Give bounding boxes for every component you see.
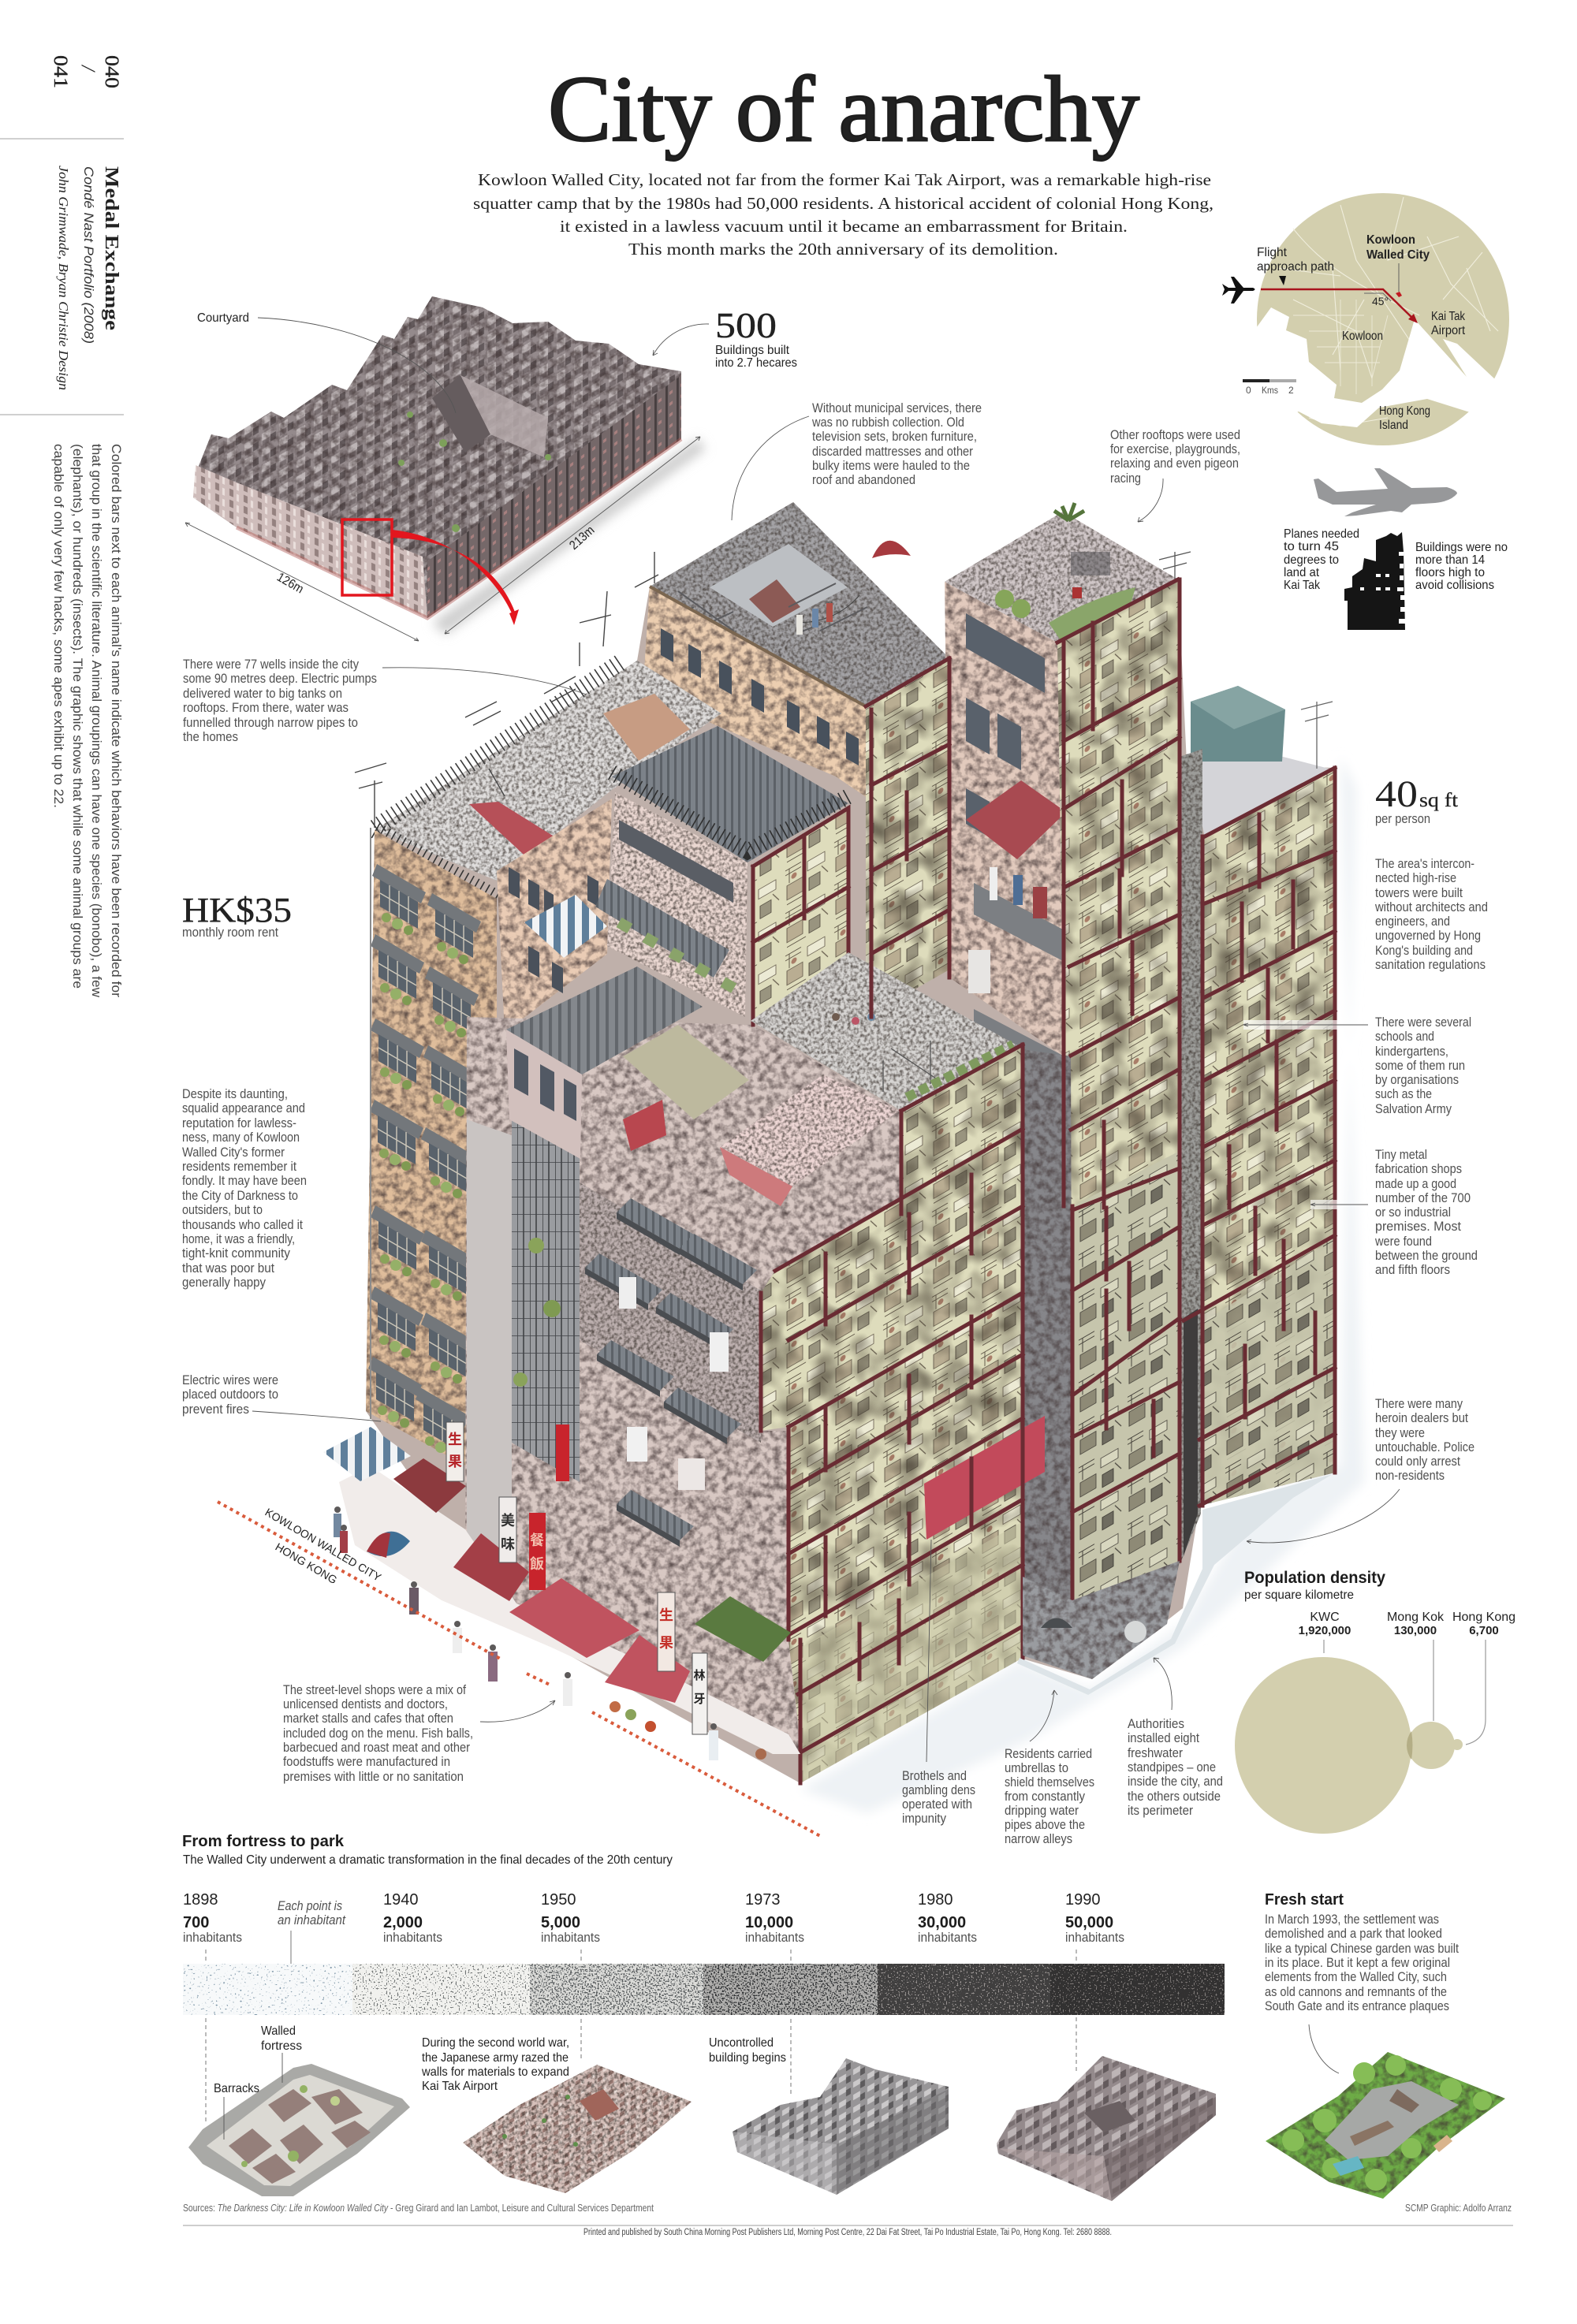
text: wells: funnelled through narrow pipes to xyxy=(183,715,358,730)
text: standpipes: the others outside xyxy=(1128,1789,1221,1804)
map: flight approach to Kai Tak: Kowloon xyxy=(1342,330,1383,343)
stat: 500 buildings: into 2.7 hecares xyxy=(715,356,797,370)
hanging signs: 林 xyxy=(693,1668,706,1682)
text: community xyxy=(182,1086,307,1290)
text: fabrication: number of the 700 xyxy=(1375,1190,1471,1205)
timeline: year labels: 50,000 xyxy=(1065,1914,1113,1931)
street and shopfronts xyxy=(339,1466,800,1754)
red-light rooms xyxy=(924,1416,1045,1540)
hanging signs xyxy=(446,1422,707,1734)
text: towers: without architects and xyxy=(1374,899,1488,914)
graphic credit: SCMP Graphic: Adolfo Arranz xyxy=(1405,2202,1512,2214)
map: flight approach to Kai Tak: Kai Tak xyxy=(1431,310,1466,323)
text: rooftops: racing xyxy=(1110,471,1141,486)
left rail: credit block: John Grimwade, Bryan Christie Design xyxy=(56,166,71,390)
left rail: page numbers: 041 xyxy=(50,55,71,88)
text: brothels: Brothels and xyxy=(902,1768,967,1783)
text: wells xyxy=(183,657,377,744)
timeline: year labels: inhabitants xyxy=(541,1930,600,1945)
second tan block xyxy=(497,799,612,1033)
model: 1898 walled fortress xyxy=(188,2064,410,2196)
text: community: that was poor but xyxy=(182,1261,274,1276)
text: standpipes: standpipes – one xyxy=(1128,1760,1216,1775)
dimension: 213m xyxy=(445,437,700,634)
hanging signs: 生 xyxy=(448,1432,462,1447)
timeline: year labels: inhabitants xyxy=(183,1930,242,1945)
water xyxy=(1246,307,1518,427)
boundary labels: HONG KONG xyxy=(273,1540,339,1586)
text: brothels: impunity xyxy=(902,1811,946,1826)
hanging signs: 果 xyxy=(659,1635,673,1651)
leader: fabrication xyxy=(1310,1200,1368,1209)
text: fabrication: premises. Most xyxy=(1375,1219,1461,1234)
dimension: 126m: 126m xyxy=(274,571,306,596)
text: street level shops: foodstuffs were manufactured in xyxy=(283,1754,450,1769)
text: standpipes: inside the city, and xyxy=(1128,1774,1223,1789)
chart: population density: per square kilometre xyxy=(1244,1588,1354,1602)
label: barracks: Barracks xyxy=(214,2082,259,2095)
text: umbrellas: Residents carried xyxy=(1005,1746,1092,1761)
annotation: each point is an inhabitant: an inhabitant xyxy=(278,1912,346,1927)
map: flight approach to Kai Tak: Island xyxy=(1379,419,1408,432)
terrace back rooftop xyxy=(375,661,721,881)
model: 1990 city xyxy=(997,2056,1216,2201)
text: rubbish xyxy=(811,400,982,487)
text: towers: nected high-rise xyxy=(1375,870,1456,885)
text: standpipes: Authorities xyxy=(1128,1716,1184,1731)
chart: population density: Mong Kok xyxy=(1387,1611,1445,1624)
text: fresh start: as old cannons and remnants of the xyxy=(1265,1984,1447,1999)
leader: standpipes xyxy=(1154,1658,1172,1710)
building underlay xyxy=(366,502,1335,1783)
text: fresh start xyxy=(1265,1912,1459,2013)
text: fresh start: In March 1993, the settlement was xyxy=(1265,1912,1439,1927)
text: second world war: During the second world war, xyxy=(422,2036,569,2050)
left rail: description paragraph: Colored bars next to each animal's name indicate which behaviors have been recorded for xyxy=(109,444,124,997)
model: 1973 city xyxy=(733,2058,949,2195)
text: street level shops: unlicensed dentists and doctors, xyxy=(283,1696,448,1711)
model: 1940 town xyxy=(463,2065,692,2193)
text: street level shops: included dog on the menu. Fish balls, xyxy=(283,1726,473,1741)
aerial illustration of the Walled City xyxy=(193,296,706,635)
text: community: home, it was a friendly, xyxy=(182,1231,295,1246)
leader: shops xyxy=(480,1700,555,1722)
text: community: Walled City's former xyxy=(182,1145,285,1160)
stat: 40 sq ft: sq ft xyxy=(1419,790,1458,811)
map: flight approach to Kai Tak: 45° xyxy=(1372,295,1389,307)
timeline: year labels: inhabitants xyxy=(745,1930,804,1945)
text: schools: There were several xyxy=(1375,1015,1471,1030)
text: rooftops: Other rooftops were used xyxy=(1110,427,1240,442)
map: flight approach to Kai Tak: Kowloon xyxy=(1366,233,1415,247)
street umbrella xyxy=(367,1532,410,1556)
timeline: year labels: inhabitants xyxy=(1065,1930,1124,1945)
section: lower big block rooms xyxy=(761,1045,1023,1783)
chart: population density: 130,000 xyxy=(1394,1624,1437,1637)
text: fresh start: demolished and a park that looked xyxy=(1265,1926,1442,1941)
text: umbrellas xyxy=(1005,1746,1094,1846)
text: towers: engineers, and xyxy=(1375,914,1450,929)
chart: population density: 1,920,000 xyxy=(1299,1624,1351,1637)
left rail: description paragraph: capable of only very few hacks, some apes exhibit up to 22. xyxy=(51,444,66,808)
flight path xyxy=(1261,289,1415,321)
text: schools: some of them run xyxy=(1375,1058,1465,1073)
left rail: credit block xyxy=(56,166,121,390)
tower B roof xyxy=(945,512,1178,642)
text: heroin xyxy=(1375,1396,1474,1483)
map: flight approach to Kai Tak: Walled City xyxy=(1366,248,1430,262)
population dot bar xyxy=(183,1964,1225,2015)
text: wells: delivered water to big tanks on xyxy=(183,686,342,701)
text: fabrication: Tiny metal xyxy=(1375,1147,1427,1162)
text: electric wires: placed outdoors to xyxy=(182,1387,278,1402)
text: standpipes: installed eight xyxy=(1128,1730,1199,1745)
text: schools: such as the xyxy=(1375,1086,1432,1101)
timeline: year labels: 1950 xyxy=(541,1891,576,1909)
text: towers: The area's intercon- xyxy=(1375,856,1474,871)
chart: population density: KWC xyxy=(1310,1611,1340,1624)
imprint: Printed and published by South China Morning Post Publishers Ltd, Morning Post Centre, 22 Dai Fat Street, Tai Po Industrial Estate, Tai Po, Hong Kong. Tel: 2680 8888. xyxy=(583,2228,1112,2237)
icon: black building silhouette xyxy=(1344,532,1405,630)
tower A roof xyxy=(650,502,949,706)
timeline: year labels: 10,000 xyxy=(745,1914,793,1931)
courtyard xyxy=(432,375,490,453)
map: flight approach to Kai Tak: Hong Kong xyxy=(1379,404,1430,418)
map: flight approach to Kai Tak: 2 xyxy=(1288,385,1294,396)
label: walled fortress: Walled xyxy=(261,2024,296,2038)
alley xyxy=(1017,1048,1072,1663)
map: flight approach to Kai Tak: Flight xyxy=(1257,246,1288,259)
right ground xyxy=(1017,1474,1333,1695)
left rail: description paragraph: (elephants), or hundreds (insects). The graphic shows that while some animal groups are xyxy=(70,444,85,989)
text: schools: schools and xyxy=(1375,1029,1434,1044)
label: walled fortress xyxy=(261,2024,302,2083)
left rail: credit block: Medal Exchange xyxy=(101,166,121,330)
text: rubbish: bulky items were hauled to the xyxy=(812,458,970,473)
text: street level shops: barbecued and roast meat and other xyxy=(283,1740,470,1755)
stat: 500 buildings xyxy=(653,305,797,370)
text: fresh start: South Gate and its entrance plaques xyxy=(1265,1998,1449,2013)
text: second world war: walls for materials to expand xyxy=(421,2065,569,2079)
text: buildings limit: Buildings were no xyxy=(1415,541,1508,554)
pink facade under grey roof xyxy=(607,792,747,1017)
heading: from fortress to park: From fortress to park xyxy=(182,1833,345,1850)
text: schools: kindergartens, xyxy=(1375,1044,1448,1059)
text: fabrication xyxy=(1374,1147,1478,1277)
chart: population density: Hong Kong xyxy=(1452,1611,1515,1624)
icon: grey jumbo jet xyxy=(1314,468,1457,516)
map: flight approach to Kai Tak: 0 xyxy=(1246,385,1251,396)
map: flight approach to Kai Tak: Airport xyxy=(1431,324,1466,337)
text: fabrication: or so industrial xyxy=(1375,1205,1451,1220)
text: brothels xyxy=(902,1768,975,1826)
umbrella xyxy=(872,541,911,558)
left rail: description paragraph xyxy=(51,444,124,998)
text: heroin: they were xyxy=(1375,1425,1425,1440)
stat: 500 buildings: 500 xyxy=(715,305,777,345)
text: wells: rooftops. From there, water was xyxy=(183,700,349,715)
hanging signs: 果 xyxy=(448,1454,462,1469)
leader: rooftops xyxy=(1138,479,1163,522)
text: uncontrolled building xyxy=(709,2036,786,2065)
section: right block rooms xyxy=(1199,768,1335,1506)
text: community: fondly. It may have been xyxy=(182,1173,307,1188)
leader: rubbish xyxy=(732,416,809,520)
text: rubbish: Without municipal services, there xyxy=(812,400,982,415)
text: wells: some 90 metres deep. Electric pumps xyxy=(183,671,377,686)
text: community: generally happy xyxy=(182,1275,266,1290)
text: rubbish: television sets, broken furniture, xyxy=(812,429,977,444)
main cutaway illustration xyxy=(323,502,1364,1813)
heading: fresh start: Fresh start xyxy=(1265,1891,1344,1909)
text: planes needed: Planes needed xyxy=(1284,527,1359,541)
stat: 40 sq ft: 40 xyxy=(1375,773,1418,815)
tower A facade xyxy=(643,587,867,798)
tower B facade xyxy=(945,582,1064,1056)
icon: small plane xyxy=(1222,277,1255,304)
left rail: description paragraph: that group in the scientific literature. Animal groupings can have one species (bonobo), a few xyxy=(89,444,104,998)
text: second world war xyxy=(421,2036,569,2093)
text: planes needed: degrees to xyxy=(1284,553,1339,567)
text: street level shops: market stalls and cafes that often xyxy=(283,1711,453,1726)
chart: population density: 6,700 xyxy=(1469,1624,1499,1637)
timeline: year labels: 1990 xyxy=(1065,1891,1101,1909)
ground glow xyxy=(800,757,1364,1813)
text: standpipes xyxy=(1128,1716,1223,1818)
text: community: the City of Darkness to xyxy=(182,1188,298,1203)
text: schools xyxy=(1375,1015,1471,1116)
text: fabrication: and fifth floors xyxy=(1375,1262,1450,1277)
label: barracks xyxy=(214,2082,259,2140)
text: fresh start: elements from the Walled City, such xyxy=(1265,1969,1447,1984)
text: towers xyxy=(1374,856,1488,972)
text: community: residents remember it xyxy=(182,1159,296,1174)
text: fabrication: fabrication shops xyxy=(1375,1161,1462,1176)
text: towers: towers were built xyxy=(1375,885,1463,900)
text: community: Despite its daunting, xyxy=(182,1086,288,1101)
text: buildings limit: floors high to xyxy=(1415,566,1485,579)
red selection box and arrow xyxy=(342,520,519,625)
text: rubbish: discarded mattresses and other xyxy=(812,444,973,459)
leader: heroin xyxy=(1247,1489,1400,1544)
text: umbrellas: pipes above the xyxy=(1005,1817,1085,1832)
section: centre column rooms xyxy=(1057,579,1180,1600)
heading: from fortress to park: The Walled City underwent a dramatic transformation in the final decades of the 20th century xyxy=(183,1853,673,1867)
chart: population density: Population density xyxy=(1244,1569,1385,1587)
front grey roof xyxy=(506,966,703,1074)
hanging signs: 味 xyxy=(501,1536,515,1552)
heading: from fortress to park xyxy=(182,1833,673,1867)
chart: population density xyxy=(1235,1569,1515,1834)
dashed timeline leaders xyxy=(206,1950,1076,2121)
pedestrians and produce xyxy=(334,1507,766,1760)
annotation: each point is an inhabitant: Each point is xyxy=(278,1898,342,1913)
red dotted boundary line xyxy=(218,1502,822,1837)
text: electric wires: prevent fires xyxy=(182,1402,249,1417)
left rail: page numbers xyxy=(50,55,122,88)
left rail: page numbers: 040 xyxy=(101,55,122,88)
timeline: year labels: inhabitants xyxy=(918,1930,977,1945)
leader: schools xyxy=(1243,1020,1368,1030)
beige left tower xyxy=(366,830,497,1466)
timeline: year labels: 30,000 xyxy=(918,1914,966,1931)
text: brothels: gambling dens xyxy=(902,1782,975,1797)
text: umbrellas: shield themselves xyxy=(1005,1775,1094,1790)
stair column xyxy=(1180,749,1202,1565)
text: heroin: untouchable. Police xyxy=(1375,1439,1474,1454)
text: heroin: non-residents xyxy=(1375,1468,1445,1483)
text: fresh start: like a typical Chinese garden was built xyxy=(1265,1941,1459,1956)
text: fresh start: in its place. But it kept a few original xyxy=(1265,1955,1450,1970)
text: rubbish: roof and abandoned xyxy=(812,472,915,487)
text: umbrellas: from constantly xyxy=(1005,1789,1085,1804)
text: street level shops xyxy=(283,1682,473,1784)
text: community: thousands who called it xyxy=(182,1217,303,1232)
section: tower A rooms xyxy=(866,658,949,1017)
text: fabrication: between the ground xyxy=(1375,1248,1478,1263)
leader: wells xyxy=(382,668,587,695)
leader: park xyxy=(1309,2024,1339,2073)
leader: brothels xyxy=(926,1540,931,1762)
text: second world war: Kai Tak Airport xyxy=(422,2080,498,2093)
text: towers: ungoverned by Hong xyxy=(1375,928,1481,943)
intro text: This month marks the 20th anniversary of its demolition. xyxy=(628,240,1058,259)
timeline: year labels: 700 xyxy=(183,1914,209,1931)
text: wells: the homes xyxy=(183,729,238,744)
stat: room rent: monthly room rent xyxy=(182,925,278,940)
hanging signs: 飯 xyxy=(530,1555,544,1572)
intro text: Kowloon Walled City, located not far from the former Kai Tak Airport, was a remarkable high-rise xyxy=(478,170,1211,189)
stat: 40 sq ft: per person xyxy=(1375,811,1430,826)
hanging signs: 牙 xyxy=(693,1693,706,1706)
floors and walls xyxy=(761,1045,1023,1783)
text: rooftops: for exercise, playgrounds, xyxy=(1110,441,1240,456)
map: flight approach to Kai Tak xyxy=(1222,193,1518,445)
text: rooftops: relaxing and even pigeon xyxy=(1110,456,1239,471)
text: towers: sanitation regulations xyxy=(1375,957,1486,972)
text: buildings limit: avoid collisions xyxy=(1415,579,1494,592)
text: community: tight-knit community xyxy=(182,1246,290,1261)
text: buildings limit: more than 14 xyxy=(1415,553,1485,567)
timeline: year labels xyxy=(183,1891,1124,1945)
text: umbrellas: narrow alleys xyxy=(1005,1831,1072,1846)
dimension: 126m xyxy=(185,523,419,641)
text: schools: Salvation Army xyxy=(1375,1101,1452,1116)
timeline: year labels: 1973 xyxy=(745,1891,781,1909)
text: planes needed: land at xyxy=(1284,566,1320,579)
timeline: year labels: inhabitants xyxy=(383,1930,442,1945)
annotation: each point is an inhabitant xyxy=(278,1898,346,1967)
text: fabrication: were found xyxy=(1374,1234,1432,1249)
text: towers: Kong's building and xyxy=(1375,943,1473,958)
lower facade mass xyxy=(465,1017,901,1752)
text: brothels: operated with xyxy=(902,1797,972,1812)
text: community: reputation for lawless- xyxy=(182,1115,296,1130)
text: standpipes: its perimeter xyxy=(1128,1803,1193,1818)
sources: Sources: The Darkness City: Life in Kowloon Walled City - Greg Girard and Ian Lambot, Leisure and Cultural Services Department xyxy=(183,2202,654,2214)
stat: 40 sq ft xyxy=(1375,773,1458,826)
text: community: squalid appearance and xyxy=(182,1101,305,1115)
timeline: year labels: 1898 xyxy=(183,1891,218,1909)
text: heroin: There were many xyxy=(1375,1396,1463,1411)
text: community: ness, many of Kowloon xyxy=(182,1130,300,1145)
middle terrace xyxy=(751,952,1017,1111)
intro text: squatter camp that by the 1980s had 50,000 residents. A historical accident of colonial Hong Kong, xyxy=(473,194,1214,213)
text: electric wires: Electric wires were xyxy=(182,1372,278,1387)
left rail: credit block: Condé Nast Portfolio (2008) xyxy=(81,166,96,344)
text: heroin: could only arrest xyxy=(1375,1454,1460,1469)
text: second world war: the Japanese army razed the xyxy=(422,2051,569,2065)
label: courtyard xyxy=(197,311,456,413)
text: planes needed xyxy=(1284,527,1359,592)
text: planes needed: to turn 45 xyxy=(1284,540,1339,553)
leader: electric wires xyxy=(252,1411,381,1421)
text: community: outsiders, but to xyxy=(182,1202,263,1217)
hanging signs: 美 xyxy=(501,1512,515,1529)
left rail: page numbers: / xyxy=(77,64,99,73)
text: uncontrolled building: building begins xyxy=(709,2051,786,2065)
text: buildings limit xyxy=(1415,541,1508,592)
intro text xyxy=(473,170,1214,259)
stat: 500 buildings: Buildings built xyxy=(715,344,790,357)
hanging signs: 餐 xyxy=(530,1533,544,1548)
model: park xyxy=(1266,2052,1505,2199)
text: fabrication: made up a good xyxy=(1375,1176,1456,1191)
timeline: year labels: 5,000 xyxy=(541,1914,580,1931)
intro text: it existed in a lawless vacuum until it became an embarrassment for Britain. xyxy=(560,217,1128,236)
small section rooms xyxy=(753,808,848,1025)
text: electric wires xyxy=(182,1372,278,1417)
label: courtyard: Courtyard xyxy=(197,311,249,325)
map: flight approach to Kai Tak: Kms xyxy=(1262,385,1278,396)
corrugated roof xyxy=(612,726,848,862)
timeline: year labels: 1940 xyxy=(383,1891,418,1909)
timeline: year labels: 2,000 xyxy=(383,1914,423,1931)
map: flight approach to Kai Tak: approach path xyxy=(1257,260,1334,274)
text: rubbish: was no rubbish collection. Old xyxy=(811,415,964,430)
text: planes needed: Kai Tak xyxy=(1284,579,1321,592)
text: street level shops: The street-level shops were a mix of xyxy=(283,1682,466,1697)
text: umbrellas: dripping water xyxy=(1005,1803,1079,1818)
text: uncontrolled building: Uncontrolled xyxy=(709,2036,774,2050)
dimension: 213m: 213m xyxy=(567,523,597,553)
label: walled fortress: fortress xyxy=(261,2039,302,2053)
aerials xyxy=(355,552,658,828)
shop awnings xyxy=(393,1458,791,1703)
text: standpipes: freshwater xyxy=(1128,1745,1183,1760)
text: street level shops: premises with little or no sanitation xyxy=(283,1769,464,1784)
boundary labels: KOWLOON WALLED CITY xyxy=(263,1506,384,1584)
timeline: year labels: 1980 xyxy=(918,1891,953,1909)
text: wells: There were 77 wells inside the city xyxy=(183,657,359,672)
text: schools: by organisations xyxy=(1375,1072,1459,1087)
leader: umbrellas xyxy=(1030,1690,1057,1741)
hanging signs: 生 xyxy=(659,1607,673,1623)
stat: room rent: HK$35 xyxy=(182,891,292,929)
text: heroin: heroin dealers but xyxy=(1375,1410,1468,1425)
striped awning xyxy=(323,1427,411,1481)
text: rooftops xyxy=(1110,427,1240,486)
far-right rooftop and hut xyxy=(1187,741,1335,836)
title: City of anarchy xyxy=(548,57,1139,161)
pink roof xyxy=(720,1074,899,1186)
text: umbrellas: umbrellas to xyxy=(1005,1760,1068,1775)
